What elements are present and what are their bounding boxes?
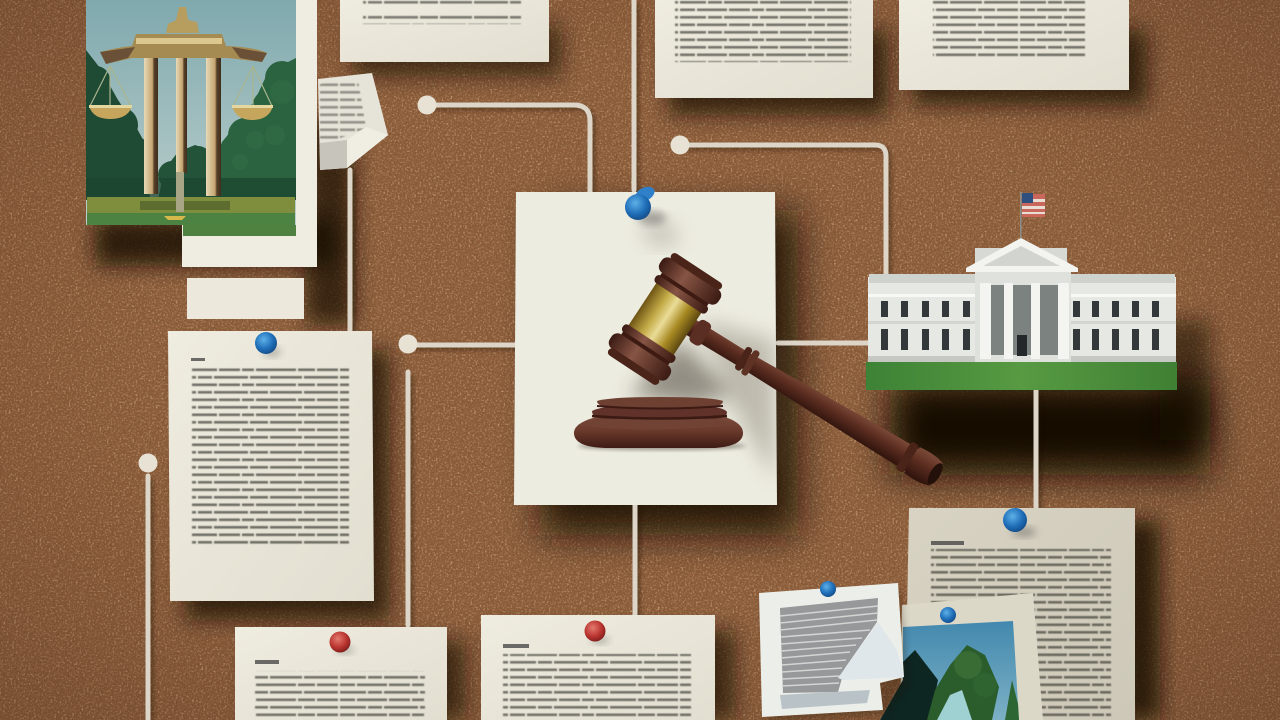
- gavel head: [602, 249, 728, 389]
- pin: bottom doc 2: [584, 620, 609, 644]
- bottom document 2: [481, 615, 715, 720]
- note with striped block: [759, 583, 908, 720]
- pin: left doc: [255, 332, 281, 357]
- white house: [866, 192, 1177, 390]
- connector nodes: [138, 96, 690, 472]
- wings: [868, 277, 1176, 362]
- pin: photo: [940, 607, 956, 623]
- right document: [905, 508, 1135, 720]
- poster picture: [78, 0, 299, 225]
- pin: right doc: [1003, 508, 1036, 537]
- top paper 1: [340, 0, 549, 62]
- scale beam: [100, 34, 267, 64]
- left document: [168, 331, 374, 601]
- bottom document 1: [235, 627, 447, 720]
- connector lines: [148, 0, 1036, 720]
- lawn: [866, 362, 1177, 390]
- photo of tree: [880, 621, 1019, 720]
- columns: [144, 58, 158, 194]
- windows: [881, 301, 1159, 350]
- blank note: [187, 278, 304, 319]
- sound block: [574, 397, 746, 450]
- connector line shadows: [151, 3, 1039, 720]
- gavel: [602, 249, 948, 490]
- poster white mount: [182, 0, 317, 267]
- pushpins: [255, 184, 1036, 654]
- poster lower layer: [183, 225, 296, 236]
- central paper: [514, 192, 777, 505]
- photo document: [870, 593, 1043, 720]
- pin: centre: [625, 184, 666, 225]
- pin: note: [820, 581, 836, 597]
- crown ornament: [166, 7, 199, 33]
- flag: [1020, 192, 1045, 238]
- pediment: [966, 238, 1078, 272]
- portico: [975, 268, 1071, 362]
- right pan: [232, 66, 273, 120]
- gavel handle: [676, 309, 948, 490]
- pin: bottom doc 1: [330, 632, 354, 654]
- folded paper: [318, 73, 388, 170]
- top paper 2: [655, 0, 873, 98]
- left pan: [89, 66, 132, 119]
- poster: scales of justice: [78, 0, 317, 267]
- top paper 3: [899, 0, 1129, 90]
